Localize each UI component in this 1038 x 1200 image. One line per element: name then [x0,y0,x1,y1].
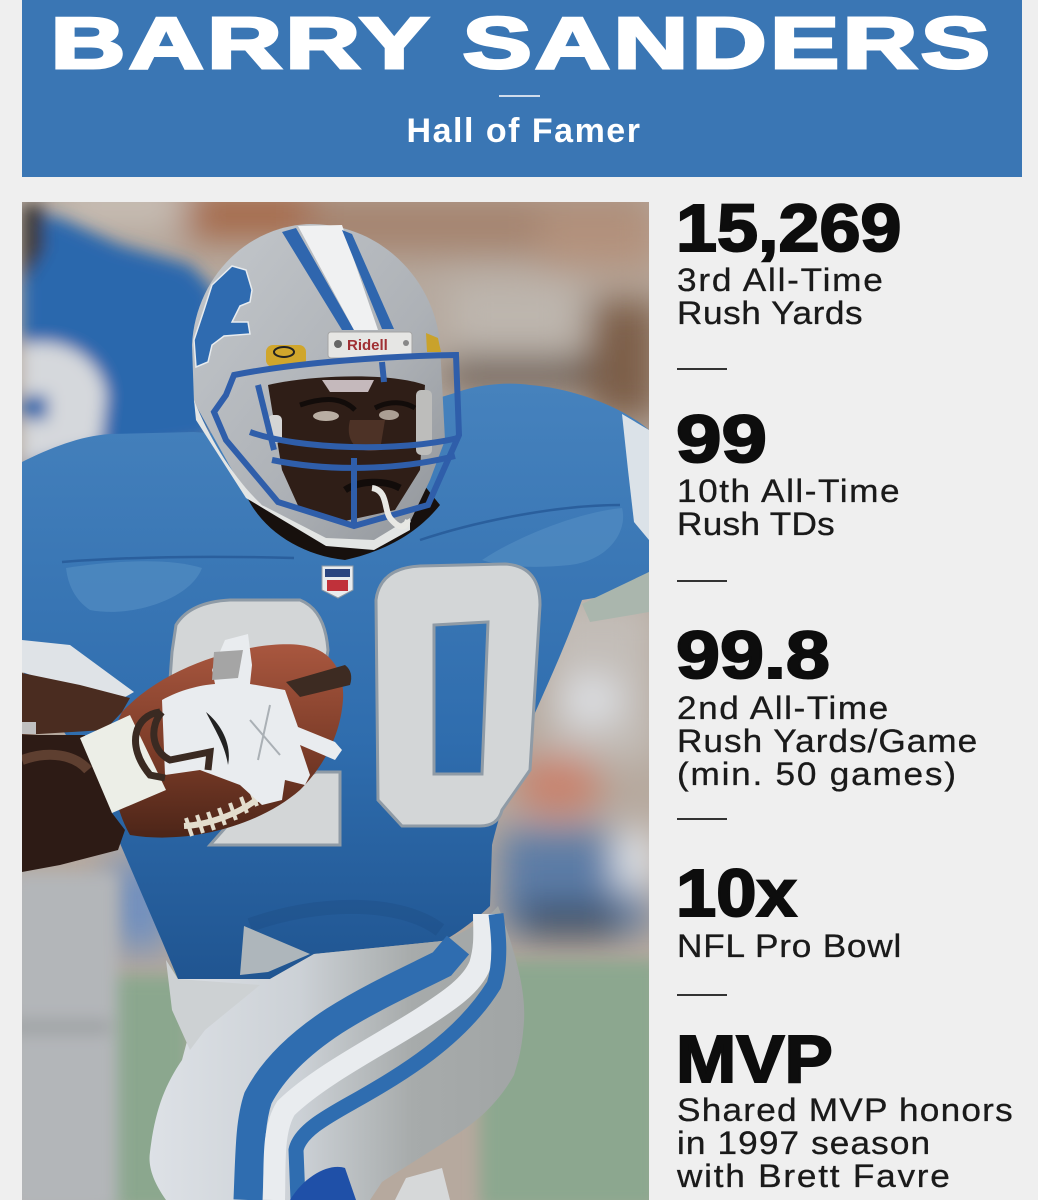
header banner [22,0,1022,177]
inner blue stripe [296,914,499,1200]
sleeve stripes [622,414,649,540]
label: 2nd All-Time [677,690,890,726]
value: MVP [676,1022,833,1097]
label: with Brett Favre [677,1158,952,1194]
blurred teammate at left [10,205,214,1200]
stat: MVP [676,1022,1014,1194]
label [677,473,901,542]
blurred stadium background [22,190,660,1200]
label: 10th All-Time [677,473,901,509]
facemask [214,355,459,526]
arm [22,673,130,872]
label: in 1997 season [677,1125,931,1161]
number 0 [376,564,540,826]
label: 3rd All-Time [677,262,885,298]
label [677,262,885,331]
outer blue stripe [248,945,458,1200]
right shoulder pad panel [482,508,623,567]
label [677,690,978,792]
football [112,644,343,838]
belt area [166,960,260,1050]
value: 99 [676,402,767,477]
subtitle: Hall of Famer [407,112,641,150]
left shoulder pad panel [66,561,202,612]
title: BARRY SANDERS [51,4,993,84]
chin strap [372,488,408,527]
helmet: Ridell [347,337,388,354]
number 2 [170,600,328,700]
pants [150,906,524,1200]
label [676,1092,1014,1194]
label: Rush Yards/Game [677,723,978,759]
helmet [192,224,445,550]
label: Shared MVP honors [677,1092,1014,1128]
value: 10x [676,856,797,931]
NFL shield [322,566,353,598]
label: NFL Pro Bowl [677,928,902,964]
stat: rush yards per game [676,618,978,792]
label: Rush TDs [677,506,835,542]
stat: rush TDs [676,402,901,542]
stat: pro bowl [676,856,902,964]
neck shadow [246,470,440,560]
label: (min. 50 games) [677,756,958,792]
stat: rush yards [676,191,901,331]
photo: running back in blue jersey [22,202,649,1200]
jersey torso [22,384,649,979]
white stripe [274,914,484,1200]
white sock [395,1168,450,1200]
value: 99.8 [676,618,830,693]
value: 15,269 [676,191,901,266]
blue sock [290,1167,356,1200]
white glove and wristband [80,634,351,813]
label: Rush Yards [677,295,863,331]
face [268,376,432,522]
